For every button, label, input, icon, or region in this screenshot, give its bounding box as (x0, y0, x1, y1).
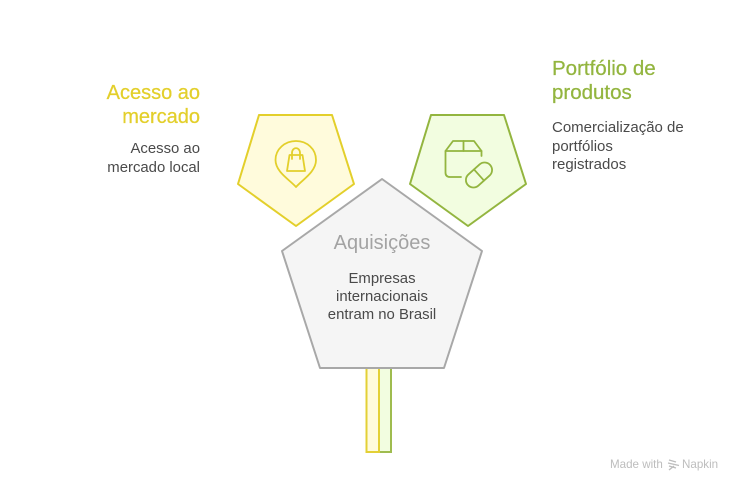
panel: aquisições pentagon (282, 179, 482, 368)
text: acesso description: mercado local (107, 160, 200, 176)
heading: portfólio de produtos: Portfólio de (552, 57, 656, 80)
text: portfólio description (552, 119, 684, 173)
text: portfólio description: portfólios (552, 138, 613, 155)
stem bars (366, 366, 391, 452)
heading: acesso ao mercado: Acesso ao (107, 82, 200, 104)
icon: napkin logo (668, 460, 679, 470)
icon: shopping bag in map pin (276, 141, 316, 187)
watermark: made with napkin: Made with (610, 458, 663, 471)
text: aquisições description: Empresas (348, 271, 416, 287)
heading: aquisições: Aquisições (334, 232, 430, 254)
heading: acesso ao mercado (107, 82, 200, 128)
heading: portfólio de produtos: produtos (552, 81, 632, 104)
text: acesso description: Acesso ao (130, 141, 200, 157)
text: aquisições description (328, 271, 436, 323)
heading: acesso ao mercado: mercado (122, 106, 200, 128)
text: portfólio description: Comercialização de (552, 119, 684, 136)
text: aquisições description: internacionais (336, 289, 428, 305)
watermark: made with napkin: Napkin (682, 458, 718, 471)
icon: box and pill (446, 141, 495, 191)
text: portfólio description: registrados (552, 156, 626, 173)
heading: portfólio de produtos (552, 57, 656, 104)
text: acesso description (107, 141, 200, 176)
watermark: made with napkin (610, 458, 718, 471)
panel: portfólio de produtos pentagon (410, 115, 526, 226)
text: aquisições description: entram no Brasil (328, 307, 436, 323)
panel: acesso ao mercado pentagon (238, 115, 354, 226)
